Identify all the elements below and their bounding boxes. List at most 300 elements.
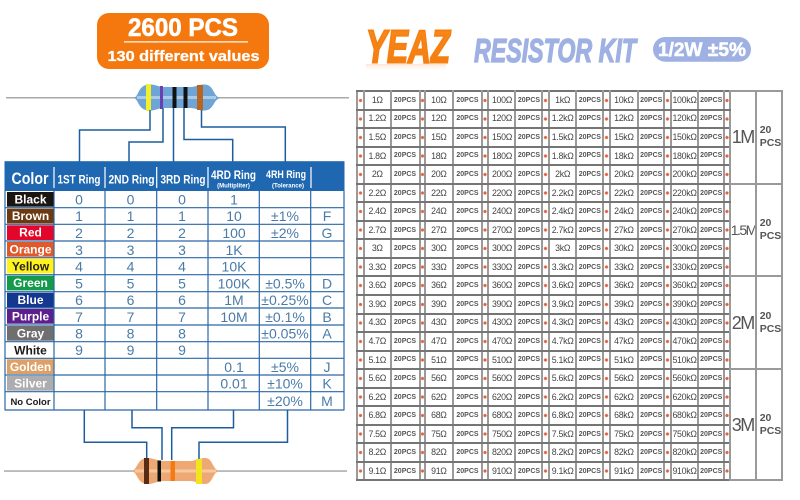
table values: 10K bbox=[222, 258, 247, 274]
group: 2M: 20PCS bbox=[579, 338, 601, 345]
group: 3M: 5.6Ω bbox=[368, 373, 386, 383]
group: 2M: 3.9Ω bbox=[368, 299, 386, 309]
group: 1.5M: 22kΩ bbox=[614, 188, 634, 198]
table header bar bbox=[5, 162, 344, 191]
group: 1.5M: 20PCS bbox=[394, 190, 416, 196]
group: 2M: 3.6kΩ bbox=[552, 280, 574, 290]
group: 1M: 20PCS bbox=[640, 171, 662, 178]
group: 1M: 1.2kΩ bbox=[552, 113, 574, 123]
top resistor: yellow purple black black brown bbox=[6, 84, 349, 111]
color code table bbox=[5, 162, 344, 410]
connectors: top resistor to table bbox=[80, 108, 285, 162]
group: 1.5M: 20PCS bbox=[394, 208, 416, 215]
color swatches: Purple bbox=[12, 310, 49, 324]
group: 2M: 360kΩ bbox=[672, 280, 697, 290]
group: 1M: 20PCS bbox=[640, 152, 662, 159]
group: 2M: 430Ω bbox=[492, 317, 512, 327]
group: 2M: 20PCS bbox=[579, 319, 601, 326]
group: 2M: 47Ω bbox=[431, 336, 447, 346]
group: 3M: 750Ω bbox=[492, 429, 512, 439]
group: 1.5M: 20PCS bbox=[394, 227, 416, 234]
table values: A bbox=[322, 326, 332, 342]
group: 1M: 20PCS bbox=[518, 152, 540, 159]
group: 3M: 620Ω bbox=[492, 392, 512, 402]
table values: 7 bbox=[127, 309, 135, 325]
group: 2M: 20PCS bbox=[394, 282, 416, 289]
group: 1.5M: 33Ω bbox=[431, 262, 447, 272]
group: 1M: 20PCS bbox=[518, 171, 540, 178]
group: 1.5M: 24kΩ bbox=[614, 206, 634, 216]
group: 2M: 5.1Ω bbox=[368, 355, 386, 365]
group: 1M: 20 bbox=[760, 124, 771, 136]
header labels: 3RD Ring bbox=[160, 172, 206, 186]
color swatches: Gray bbox=[17, 326, 44, 340]
group: 2M: 43Ω bbox=[431, 317, 447, 327]
group: 1M: 1.5kΩ bbox=[552, 132, 574, 142]
group: 1M: 20PCS bbox=[640, 97, 662, 104]
table values: 8 bbox=[127, 326, 135, 342]
heading: resistor kit: RESISTOR KIT bbox=[474, 32, 638, 69]
group: 1.5M: 20PCS bbox=[456, 227, 479, 234]
group: 3M: 75Ω bbox=[431, 429, 447, 439]
group: 1M: 20PCS bbox=[700, 134, 722, 141]
group: 3M: 5.6kΩ bbox=[552, 373, 574, 383]
group: 1M: 20PCS bbox=[700, 97, 722, 104]
group: 1M: 2Ω bbox=[372, 169, 383, 179]
group: 2M: 20PCS bbox=[700, 319, 722, 326]
group: 2M: 39kΩ bbox=[614, 299, 634, 309]
group: 1M bbox=[358, 95, 781, 179]
group: 2M: 20PCS bbox=[640, 338, 662, 345]
group: 1M: 20PCS bbox=[579, 115, 601, 122]
table values: 0 bbox=[178, 192, 186, 208]
table values: M bbox=[321, 393, 333, 409]
group: 1M: 1Ω bbox=[372, 95, 383, 105]
group: 1M: 1M bbox=[732, 127, 754, 147]
group: 1M: 20PCS bbox=[518, 115, 540, 122]
group: 2M: 2M bbox=[732, 313, 754, 333]
group: 3M: 20PCS bbox=[518, 375, 540, 382]
group: 3M: 820kΩ bbox=[672, 447, 697, 457]
group: 1M: 100Ω bbox=[492, 95, 512, 105]
group: 3M: 62Ω bbox=[431, 392, 447, 402]
group: 2M: 390Ω bbox=[492, 299, 512, 309]
group: 2M: PCS bbox=[760, 323, 781, 335]
group: 2M: 20PCS bbox=[700, 356, 722, 363]
group: 1.5M: 20PCS bbox=[394, 264, 416, 271]
color swatches: White bbox=[14, 344, 47, 358]
group: 1M: 20Ω bbox=[431, 169, 447, 179]
group: 2M: 360Ω bbox=[492, 280, 512, 290]
group: 1.5M: 1.5M bbox=[731, 222, 756, 238]
group: 1M: 150kΩ bbox=[672, 132, 697, 142]
group: 3M: 680kΩ bbox=[672, 410, 697, 420]
table values: C bbox=[322, 292, 332, 308]
color swatches: Silver bbox=[14, 376, 47, 390]
group: 1.5M: 20PCS bbox=[518, 227, 540, 234]
table values: 1 bbox=[75, 208, 83, 224]
group: 1.5M: 300Ω bbox=[492, 243, 512, 253]
group: 3M: PCS bbox=[760, 425, 781, 437]
group: 1.5M: 3.3kΩ bbox=[552, 262, 574, 272]
group: 3M: 20PCS bbox=[456, 394, 479, 401]
group: 1.5M: 20PCS bbox=[456, 208, 479, 215]
bottom resistor: brown black orange yellow bbox=[4, 458, 347, 484]
table values: 0.1 bbox=[224, 359, 244, 375]
group: 2M: 43kΩ bbox=[614, 317, 634, 327]
group: 1.5M: 33kΩ bbox=[614, 262, 634, 272]
group: 1.5M: 20PCS bbox=[518, 264, 540, 271]
group: 1M: 20PCS bbox=[579, 97, 601, 104]
group: 3M: 20PCS bbox=[579, 449, 601, 456]
group: 1.5M: 270kΩ bbox=[672, 225, 697, 235]
group: 3M: 20PCS bbox=[579, 468, 601, 475]
group: 1M: 120kΩ bbox=[672, 113, 697, 123]
table values: 100 bbox=[222, 225, 246, 241]
group: 2M: 390kΩ bbox=[672, 299, 697, 309]
group: 3M: 20PCS bbox=[640, 468, 662, 475]
table values: 1K bbox=[225, 242, 243, 258]
group: 2M: 470Ω bbox=[492, 336, 512, 346]
group: 1M: 15kΩ bbox=[614, 132, 634, 142]
table values: 4 bbox=[178, 258, 186, 274]
group: 1M: 20PCS bbox=[394, 171, 416, 178]
group: 3M: 20 bbox=[760, 412, 771, 424]
group: 1.5M: 20PCS bbox=[700, 264, 722, 271]
group: 1M: 1.8kΩ bbox=[552, 151, 574, 161]
group: 1.5M: 2.7kΩ bbox=[552, 225, 574, 235]
group: 1M: 200kΩ bbox=[672, 169, 697, 179]
group: 3M: 82Ω bbox=[431, 447, 447, 457]
group: 1M: 10Ω bbox=[431, 95, 447, 105]
group: 1.5M: 20 bbox=[760, 217, 771, 229]
group: 3M: 20PCS bbox=[456, 431, 479, 438]
group: 3M: 3M bbox=[732, 415, 754, 435]
group: 2M: 20PCS bbox=[456, 319, 479, 326]
group: 3M: 20PCS bbox=[394, 468, 416, 475]
group: 1.5M: 20PCS bbox=[518, 190, 540, 196]
group: 1.5M: 2.2Ω bbox=[368, 188, 386, 198]
group: 3M: 20PCS bbox=[700, 394, 722, 401]
table values: 4 bbox=[75, 258, 83, 274]
group: 2M: 20PCS bbox=[700, 282, 722, 289]
group: 2M: 36Ω bbox=[431, 280, 447, 290]
group: 3M: 6.2Ω bbox=[368, 392, 386, 402]
group: 1M: 20PCS bbox=[700, 152, 722, 159]
color swatches: Yellow bbox=[12, 260, 50, 274]
group: 2M: 430kΩ bbox=[672, 317, 697, 327]
group: 1.5M: 2.4kΩ bbox=[552, 206, 574, 216]
group: 1M: PCS bbox=[760, 137, 781, 149]
group: 2M: 20PCS bbox=[640, 282, 662, 289]
group: 2M: 3.6Ω bbox=[368, 280, 386, 290]
table values: J bbox=[324, 359, 330, 375]
group: 1M: 20PCS bbox=[579, 134, 601, 141]
group: 3M: 20PCS bbox=[640, 431, 662, 438]
table values: 3 bbox=[127, 242, 135, 258]
group: 1M: 20PCS bbox=[640, 134, 662, 141]
group: 2M: 20PCS bbox=[640, 319, 662, 326]
group: 3M: 6.8Ω bbox=[368, 410, 386, 420]
group: 1.5M: 220kΩ bbox=[672, 188, 697, 198]
group: 2M: 4.7kΩ bbox=[552, 336, 574, 346]
group: 3M: 20PCS bbox=[640, 412, 662, 419]
group: 2M: 20PCS bbox=[700, 301, 722, 308]
group: 1.5M: 20PCS bbox=[579, 264, 601, 271]
group: 1.5M: 330Ω bbox=[492, 262, 512, 272]
group: 1M: 200Ω bbox=[492, 169, 512, 179]
group: 3M: 20PCS bbox=[394, 375, 416, 382]
group: 3M: 62kΩ bbox=[614, 392, 634, 402]
group: 1.5M: 20PCS bbox=[700, 227, 722, 234]
group: 1M: 120Ω bbox=[492, 113, 512, 123]
group: 3M: 820Ω bbox=[492, 447, 512, 457]
group: 1M: 20PCS bbox=[518, 97, 540, 104]
group: 3M: 56Ω bbox=[431, 373, 447, 383]
header labels bbox=[12, 167, 311, 190]
header labels: 4RD Ring bbox=[211, 168, 256, 182]
table values: 10 bbox=[226, 208, 242, 224]
group: 3M: 20PCS bbox=[456, 412, 479, 419]
group: 2M: 20PCS bbox=[456, 338, 479, 345]
table values: 1 bbox=[127, 208, 135, 224]
table values: 100K bbox=[218, 276, 251, 292]
group: 2M: 51kΩ bbox=[614, 355, 634, 365]
group: 1M: 150Ω bbox=[492, 132, 512, 142]
group: 2M: 20PCS bbox=[394, 319, 416, 326]
table values: D bbox=[322, 276, 332, 292]
table values: ±0.1% bbox=[265, 309, 305, 325]
header labels: 2ND Ring bbox=[108, 172, 154, 186]
group: 2M: 4.7Ω bbox=[368, 336, 386, 346]
group: 1M: 15Ω bbox=[431, 132, 447, 142]
group: 1.5M: 2.4Ω bbox=[368, 206, 386, 216]
group: 2M: 20PCS bbox=[579, 282, 601, 289]
group: 1.5M: 330kΩ bbox=[672, 262, 697, 272]
group: 3M: 20PCS bbox=[640, 375, 662, 382]
group: 3M: 9.1Ω bbox=[368, 466, 386, 476]
group: 3M: 56kΩ bbox=[614, 373, 634, 383]
group: 3M: 20PCS bbox=[700, 375, 722, 382]
group: 1M: 1kΩ bbox=[555, 95, 570, 105]
group: 1M: 1.8Ω bbox=[368, 151, 386, 161]
grid lines bbox=[5, 191, 344, 410]
group: 1M: 12Ω bbox=[431, 113, 447, 123]
group: 2M: 39Ω bbox=[431, 299, 447, 309]
group: 1M: 20PCS bbox=[394, 97, 416, 104]
header labels: 4RH Ring bbox=[266, 169, 306, 181]
group: 1M: 12kΩ bbox=[614, 113, 634, 123]
table values: ±20% bbox=[267, 393, 303, 409]
badge: 2600 PCS bbox=[97, 13, 269, 69]
group: 3M: 910Ω bbox=[492, 466, 512, 476]
group: 2M: 20PCS bbox=[456, 356, 479, 363]
group: 1M: 20PCS bbox=[518, 134, 540, 141]
group: 1.5M: 20PCS bbox=[579, 190, 601, 196]
table values: 1M bbox=[224, 292, 244, 308]
group: 3M: 20PCS bbox=[579, 431, 601, 438]
group: 3M: 20PCS bbox=[518, 449, 540, 456]
color swatches bbox=[7, 192, 54, 408]
group: 2M: 20PCS bbox=[394, 338, 416, 345]
group: 2M: 20PCS bbox=[579, 356, 601, 363]
group: 1.5M: 20PCS bbox=[518, 245, 540, 252]
color swatches: Red bbox=[19, 226, 42, 240]
table values: 0 bbox=[127, 192, 135, 208]
group: 1M: 100kΩ bbox=[672, 95, 697, 105]
group: 2M: 20PCS bbox=[518, 356, 540, 363]
table values: ±2% bbox=[271, 225, 299, 241]
group: 1M: 180Ω bbox=[492, 151, 512, 161]
table values bbox=[75, 192, 333, 409]
group: 1M: 20PCS bbox=[640, 115, 662, 122]
group: 3M: 560Ω bbox=[492, 373, 512, 383]
group: 2M: 20PCS bbox=[518, 338, 540, 345]
table values: 5 bbox=[178, 276, 186, 292]
group: 3M: 20PCS bbox=[518, 468, 540, 475]
group: 3M: 8.2kΩ bbox=[552, 447, 574, 457]
table values: 8 bbox=[178, 326, 186, 342]
group: 3M: 68kΩ bbox=[614, 410, 634, 420]
group: 1M: 10kΩ bbox=[614, 95, 634, 105]
group: 1.5M: 270Ω bbox=[492, 225, 512, 235]
group: 1.5M bbox=[358, 188, 781, 272]
group: 3M: 7.5kΩ bbox=[552, 429, 574, 439]
table values: 9 bbox=[178, 342, 186, 358]
group: 1.5M: 20PCS bbox=[456, 245, 479, 252]
group: 1.5M: 20PCS bbox=[640, 190, 662, 196]
table values: 6 bbox=[75, 292, 83, 308]
group: 1.5M: 20PCS bbox=[579, 245, 601, 252]
group: 1M: 20PCS bbox=[456, 97, 479, 104]
color swatches: Green bbox=[13, 276, 48, 290]
group: 1.5M: 240Ω bbox=[492, 206, 512, 216]
group: 1.5M: 24Ω bbox=[431, 206, 447, 216]
table values: ±10% bbox=[267, 376, 303, 392]
group: 1.5M: 20PCS bbox=[700, 208, 722, 215]
group: 1M: 20PCS bbox=[579, 171, 601, 178]
group: 1.5M: 20PCS bbox=[456, 264, 479, 271]
group: 1.5M: 20PCS bbox=[579, 208, 601, 215]
group: 2M: 510kΩ bbox=[672, 355, 697, 365]
group: 3M: 20PCS bbox=[456, 375, 479, 382]
table values: 3 bbox=[178, 242, 186, 258]
group: 2M: 20PCS bbox=[518, 282, 540, 289]
group: 1M: 20PCS bbox=[700, 171, 722, 178]
group: 2M: 5.1kΩ bbox=[552, 355, 574, 365]
group: 2M: 20PCS bbox=[579, 301, 601, 308]
group: 3M: 6.2kΩ bbox=[552, 392, 574, 402]
group: 1.5M: 220Ω bbox=[492, 188, 512, 198]
group: 2M: 20PCS bbox=[640, 356, 662, 363]
group: 2M: 36kΩ bbox=[614, 280, 634, 290]
table values: 1 bbox=[230, 192, 238, 208]
table values: ±1% bbox=[271, 208, 299, 224]
group: 3M: 680Ω bbox=[492, 410, 512, 420]
group: 3M: 20PCS bbox=[700, 412, 722, 419]
group: 1M: 2kΩ bbox=[555, 169, 570, 179]
table values: 7 bbox=[75, 309, 83, 325]
table values: 5 bbox=[127, 276, 135, 292]
group: 3M: 750kΩ bbox=[672, 429, 697, 439]
table values: 0 bbox=[75, 192, 83, 208]
group: 1M: 18kΩ bbox=[614, 151, 634, 161]
table values: ±0.05% bbox=[261, 326, 309, 342]
group: 3M bbox=[358, 373, 781, 476]
group: 1.5M: 20PCS bbox=[640, 208, 662, 215]
group: 1.5M: 3Ω bbox=[372, 243, 383, 253]
group: 2M: 470kΩ bbox=[672, 336, 697, 346]
group: 1M: 1.5Ω bbox=[368, 132, 386, 142]
table values: 5 bbox=[75, 276, 83, 292]
table values: 6 bbox=[178, 292, 186, 308]
group: 2M: 47kΩ bbox=[614, 336, 634, 346]
group: 2M: 51Ω bbox=[431, 355, 447, 365]
group: 3M: 20PCS bbox=[700, 431, 722, 438]
group: 2M: 20PCS bbox=[640, 301, 662, 308]
group: 1.5M: 20PCS bbox=[579, 227, 601, 234]
group: 1M: 20PCS bbox=[579, 152, 601, 159]
group: 1.5M: 300kΩ bbox=[672, 243, 697, 253]
table values: ±5% bbox=[271, 359, 299, 375]
group: 1M: 20PCS bbox=[394, 115, 416, 122]
group: 1.5M: 20PCS bbox=[394, 245, 416, 252]
table values: ±0.25% bbox=[261, 292, 309, 308]
group: 3M: 6.8kΩ bbox=[552, 410, 574, 420]
group: 2M: 20 bbox=[760, 310, 771, 322]
group: 2M: 20PCS bbox=[456, 282, 479, 289]
group: 3M: 20PCS bbox=[518, 431, 540, 438]
group: 3M: 910kΩ bbox=[672, 466, 697, 476]
group: 1M: 20PCS bbox=[456, 152, 479, 159]
group: 2M: 20PCS bbox=[700, 338, 722, 345]
group: 2M: 4.3Ω bbox=[368, 317, 386, 327]
group: 3M: 20PCS bbox=[394, 412, 416, 419]
group: 3M: 82kΩ bbox=[614, 447, 634, 457]
table values: 2 bbox=[178, 225, 186, 241]
group: 3M: 7.5Ω bbox=[368, 429, 386, 439]
group: 1M: 20PCS bbox=[394, 134, 416, 141]
table values: 7 bbox=[178, 309, 186, 325]
resistor kit value table bbox=[356, 90, 783, 481]
group: 3M: 8.2Ω bbox=[368, 447, 386, 457]
group: 3M: 20PCS bbox=[456, 449, 479, 456]
table values: ±0.5% bbox=[265, 276, 305, 292]
group: 1.5M: 20PCS bbox=[518, 208, 540, 215]
table values: B bbox=[322, 309, 332, 325]
group: 3M: 620kΩ bbox=[672, 392, 697, 402]
table values: K bbox=[322, 376, 332, 392]
group: 3M: 20PCS bbox=[579, 412, 601, 419]
table values: 10M bbox=[220, 309, 248, 325]
color swatches: Blue bbox=[17, 293, 44, 307]
group: 2M: 510Ω bbox=[492, 355, 512, 365]
group: 1.5M: 27kΩ bbox=[614, 225, 634, 235]
group: 1.5M: PCS bbox=[760, 230, 781, 242]
logo: YEAZ: YEAZ bbox=[366, 20, 451, 72]
group: 1.5M: 3.3Ω bbox=[368, 262, 386, 272]
group: 1.5M: 3kΩ bbox=[555, 243, 570, 253]
group: 3M: 20PCS bbox=[579, 394, 601, 401]
table values: 4 bbox=[127, 258, 135, 274]
group: 2M bbox=[358, 280, 781, 365]
logo: YEAZ bbox=[366, 20, 451, 72]
group: 1.5M: 20PCS bbox=[700, 190, 722, 196]
table values: 2 bbox=[127, 225, 135, 241]
group: 1.5M: 30Ω bbox=[431, 243, 447, 253]
group: 1.5M: 20PCS bbox=[640, 227, 662, 234]
group: 3M: 20PCS bbox=[394, 394, 416, 401]
